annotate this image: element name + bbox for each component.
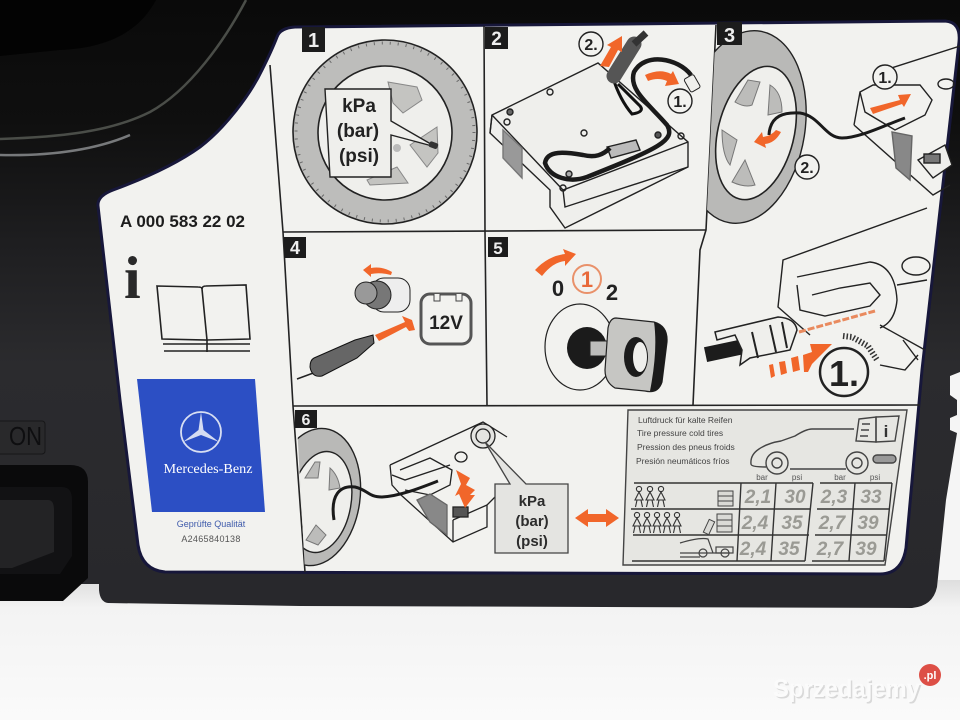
arrow orange valve	[754, 130, 781, 148]
arrow orange socket	[870, 94, 911, 114]
number badge 6	[295, 410, 317, 429]
compressor box	[490, 63, 688, 228]
marker 1. top	[873, 65, 897, 89]
number badge 2	[485, 27, 508, 50]
marker 1. large: 1.	[829, 353, 859, 394]
ribbed dial edge	[843, 336, 877, 360]
watermark: Sprzedajemy	[774, 676, 922, 704]
code caption: A2465840138	[181, 534, 241, 544]
marker 2.: 2.	[584, 37, 598, 54]
panel grid lines	[270, 25, 920, 572]
arrow orange plug-in	[375, 316, 415, 341]
watermark: .pl	[924, 670, 936, 682]
pressure values: 2,4	[739, 539, 767, 560]
socket cap	[355, 278, 410, 312]
embossed word ON: ON	[9, 421, 42, 451]
occupant icons row 2	[633, 512, 681, 533]
column labels	[756, 473, 880, 482]
ignition lock and key	[545, 304, 667, 392]
quality caption: Geprüfte Qualität	[177, 519, 246, 529]
double arrow	[575, 509, 619, 527]
dashed insertion guide	[799, 311, 875, 332]
icon: three-pointed star	[181, 412, 221, 452]
panel 2: unwind hose and plug	[485, 27, 701, 228]
table grid	[631, 483, 892, 561]
callout: kPa bar psi gauge	[485, 442, 568, 553]
panel 3: connect hose	[704, 22, 960, 398]
position 2: 2	[606, 280, 618, 305]
panel 6: start compressor and check pressure	[263, 410, 907, 571]
moulded highlight ridge	[0, 0, 246, 139]
table titles: Pression des pneus froids	[637, 442, 735, 452]
callout: kPa bar psi: (bar)	[337, 121, 379, 142]
watermark: Sprzedajemy	[773, 675, 920, 703]
marker 1.: 1.	[673, 94, 687, 111]
wheel side view	[707, 30, 807, 224]
table titles: Luftdruck für kalte Reifen	[638, 415, 733, 425]
pressure values: 39	[857, 513, 879, 534]
callout: kPa bar psi	[325, 89, 439, 177]
icon: open book	[157, 285, 250, 352]
pressure values: 30	[784, 487, 806, 508]
column labels: psi	[870, 473, 880, 482]
column labels: bar	[834, 473, 846, 482]
pressure values: 2,1	[744, 487, 771, 508]
compressor detail top	[854, 46, 960, 195]
pressure values: 2,7	[816, 539, 845, 560]
pressure values	[739, 487, 882, 560]
compressor	[390, 422, 507, 542]
marker 1. top: 1.	[878, 70, 892, 87]
plug	[297, 335, 374, 379]
switch recess	[0, 465, 88, 601]
panel 5: ignition key	[488, 237, 667, 392]
recess at top left	[0, 0, 156, 56]
blue Mercedes-Benz logo block: Mercedes-Benz	[164, 462, 252, 477]
arrow orange rotate	[363, 264, 392, 277]
number badge 4: 4	[290, 238, 300, 258]
callout: kPa bar psi: (psi)	[339, 146, 379, 167]
callout: kPa bar psi gauge: kPa	[519, 493, 546, 510]
icon: manual book	[856, 416, 899, 442]
marker 2.: 2.	[800, 160, 814, 177]
number badge 6: 6	[302, 412, 311, 429]
embossed word ON	[0, 421, 45, 454]
icon: 12V battery: 12V	[429, 313, 463, 334]
arrow orange 2	[600, 36, 622, 67]
pressure values: 39	[855, 539, 877, 560]
position 0: 0	[552, 276, 564, 301]
column labels: bar	[756, 473, 768, 482]
position 1 circled	[573, 265, 601, 293]
table titles: Presión neumáticos fríos	[636, 456, 730, 466]
luggage icons	[703, 491, 733, 535]
pressure values: 33	[860, 487, 882, 508]
callout: kPa bar psi gauge: (bar)	[515, 513, 549, 530]
tire pressure table	[623, 410, 907, 565]
arrow orange dashed	[769, 344, 832, 378]
number badge 1: 1	[308, 30, 319, 52]
marker 2.	[795, 155, 819, 179]
hose	[545, 59, 691, 179]
power plug	[613, 33, 646, 114]
pressure values: 35	[778, 539, 800, 560]
part number: A 000 583 22 02	[120, 212, 245, 231]
number badge 5	[488, 237, 508, 258]
callout: kPa bar psi gauge: (psi)	[516, 533, 548, 550]
pressure values: 2,4	[741, 513, 769, 534]
position 1 circled: 1	[581, 267, 593, 292]
table titles: Tire pressure cold tires	[637, 428, 723, 438]
compressor socket detail	[778, 208, 930, 370]
number badge 3: 3	[724, 25, 735, 47]
trailer icon	[680, 538, 733, 557]
pressure values: 2,3	[820, 487, 848, 508]
marker 2.	[579, 32, 603, 56]
tire pressure table: i	[884, 422, 888, 441]
marker 1. large	[820, 348, 868, 396]
plug and cable	[704, 317, 797, 365]
marker 1.	[668, 89, 692, 113]
background: white floor	[0, 580, 960, 720]
blue Mercedes-Benz logo block	[137, 379, 265, 512]
wheel	[298, 428, 362, 566]
icon: info i: i	[124, 245, 141, 311]
occupant icons row 1	[635, 486, 665, 507]
arrow orange turn	[535, 249, 576, 276]
icon: 12V battery	[421, 294, 471, 344]
watermark	[773, 664, 941, 704]
hose end fitting	[684, 74, 701, 93]
arrow orange 1	[645, 71, 679, 86]
number badge 2: 2	[491, 29, 502, 50]
car outline	[751, 429, 896, 474]
number badge 1	[302, 27, 325, 52]
panel 1: read tire pressure	[293, 27, 477, 224]
connecting hose	[769, 113, 905, 138]
table titles	[636, 415, 735, 466]
number badge 3	[717, 22, 742, 47]
number badge 4	[284, 237, 306, 258]
pressure values: 2,7	[818, 513, 847, 534]
pressure values: 35	[781, 513, 803, 534]
number badge 5: 5	[493, 239, 503, 258]
hose	[333, 481, 438, 520]
left column	[120, 212, 265, 544]
moulded highlight lower	[0, 135, 130, 155]
panel 4: power socket	[284, 237, 471, 379]
column labels: psi	[792, 473, 802, 482]
arrow orange press	[455, 470, 475, 508]
callout: kPa bar psi: kPa	[342, 96, 376, 117]
white label card	[98, 21, 959, 574]
wheel	[293, 40, 477, 224]
